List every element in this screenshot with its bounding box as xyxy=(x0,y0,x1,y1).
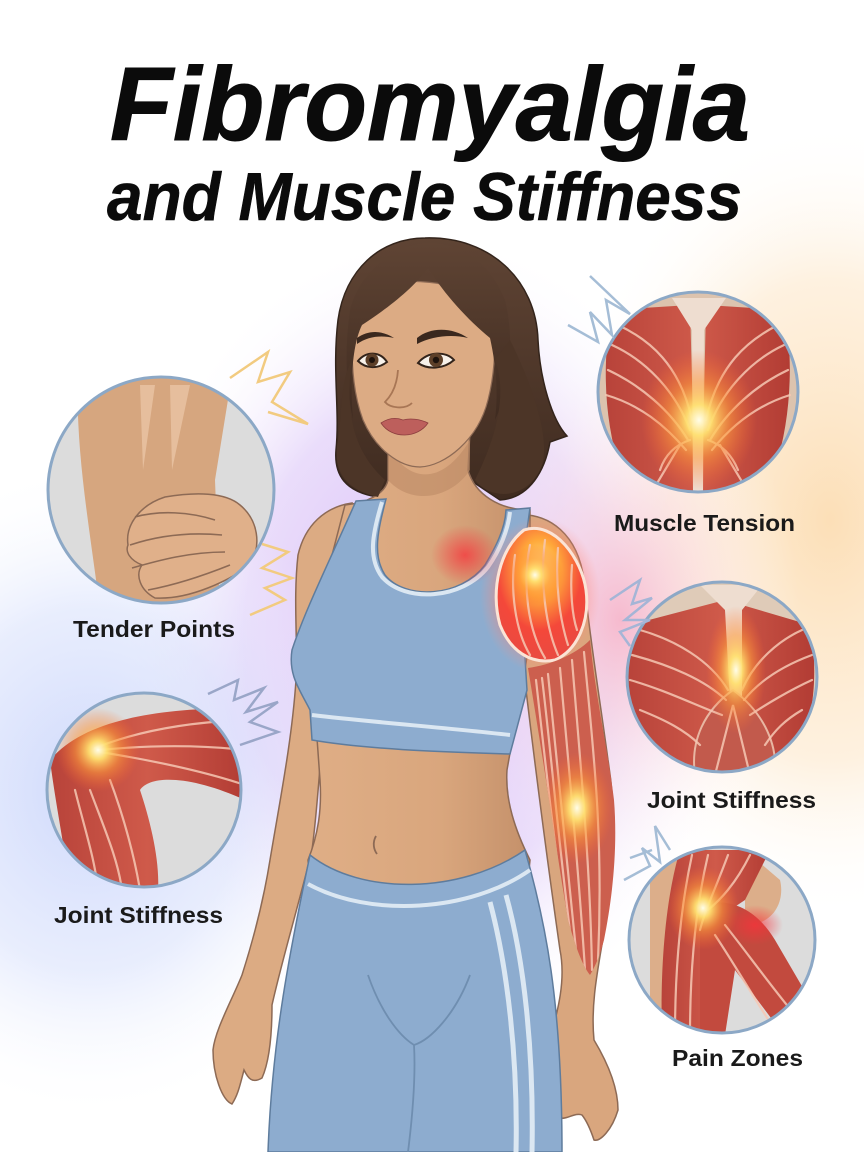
right arm xyxy=(515,515,618,1140)
label: Pain Zones xyxy=(672,1045,803,1071)
neckline trim xyxy=(373,502,510,594)
joint circle xyxy=(45,690,245,890)
figure: woman xyxy=(213,238,620,1152)
crop top xyxy=(291,499,530,754)
panel: pain zones xyxy=(624,826,820,1071)
pants xyxy=(268,850,562,1152)
tender points circle xyxy=(45,375,280,610)
label: Muscle Tension xyxy=(614,510,795,536)
stiffness zigzag xyxy=(610,580,652,646)
top band xyxy=(312,715,510,735)
back lower circle xyxy=(625,580,820,775)
panel: tender points xyxy=(45,352,308,642)
label: Tender Points xyxy=(73,616,235,642)
panel: muscle tension xyxy=(568,276,805,536)
neck and torso xyxy=(308,430,530,910)
hair back xyxy=(336,238,567,500)
pain zigzag xyxy=(624,826,670,880)
tender points zigzag top xyxy=(230,352,308,424)
pants side stripes xyxy=(490,895,532,1152)
eyebrows xyxy=(357,330,468,344)
chest red spot xyxy=(431,525,499,585)
hip circle xyxy=(630,848,814,1032)
joint zigzag xyxy=(208,680,278,745)
hair lock left xyxy=(337,360,385,497)
waistband trim xyxy=(308,870,530,906)
back circle xyxy=(600,294,796,490)
tender points zigzag bottom xyxy=(250,544,292,615)
left eye xyxy=(358,354,387,367)
pants crease xyxy=(368,975,470,1152)
label: Joint Stiffness xyxy=(647,787,816,813)
title xyxy=(107,47,750,235)
hair front xyxy=(347,243,510,420)
neck shadow xyxy=(388,440,470,496)
shoulder pain xyxy=(480,517,600,673)
navel xyxy=(374,836,377,854)
hair lock right xyxy=(475,340,544,494)
nose xyxy=(385,370,412,407)
title: and Muscle Stiffness xyxy=(107,159,742,235)
title: Fibromyalgia xyxy=(110,47,750,163)
tension zigzag xyxy=(568,276,630,342)
label: Joint Stiffness xyxy=(54,902,223,928)
panel: joint stiffness right xyxy=(610,580,820,813)
right eye xyxy=(418,353,454,368)
arm muscle xyxy=(528,640,616,975)
lips xyxy=(381,418,428,435)
face xyxy=(352,281,495,467)
left arm xyxy=(213,503,352,1104)
panel: joint stiffness left xyxy=(45,680,278,928)
